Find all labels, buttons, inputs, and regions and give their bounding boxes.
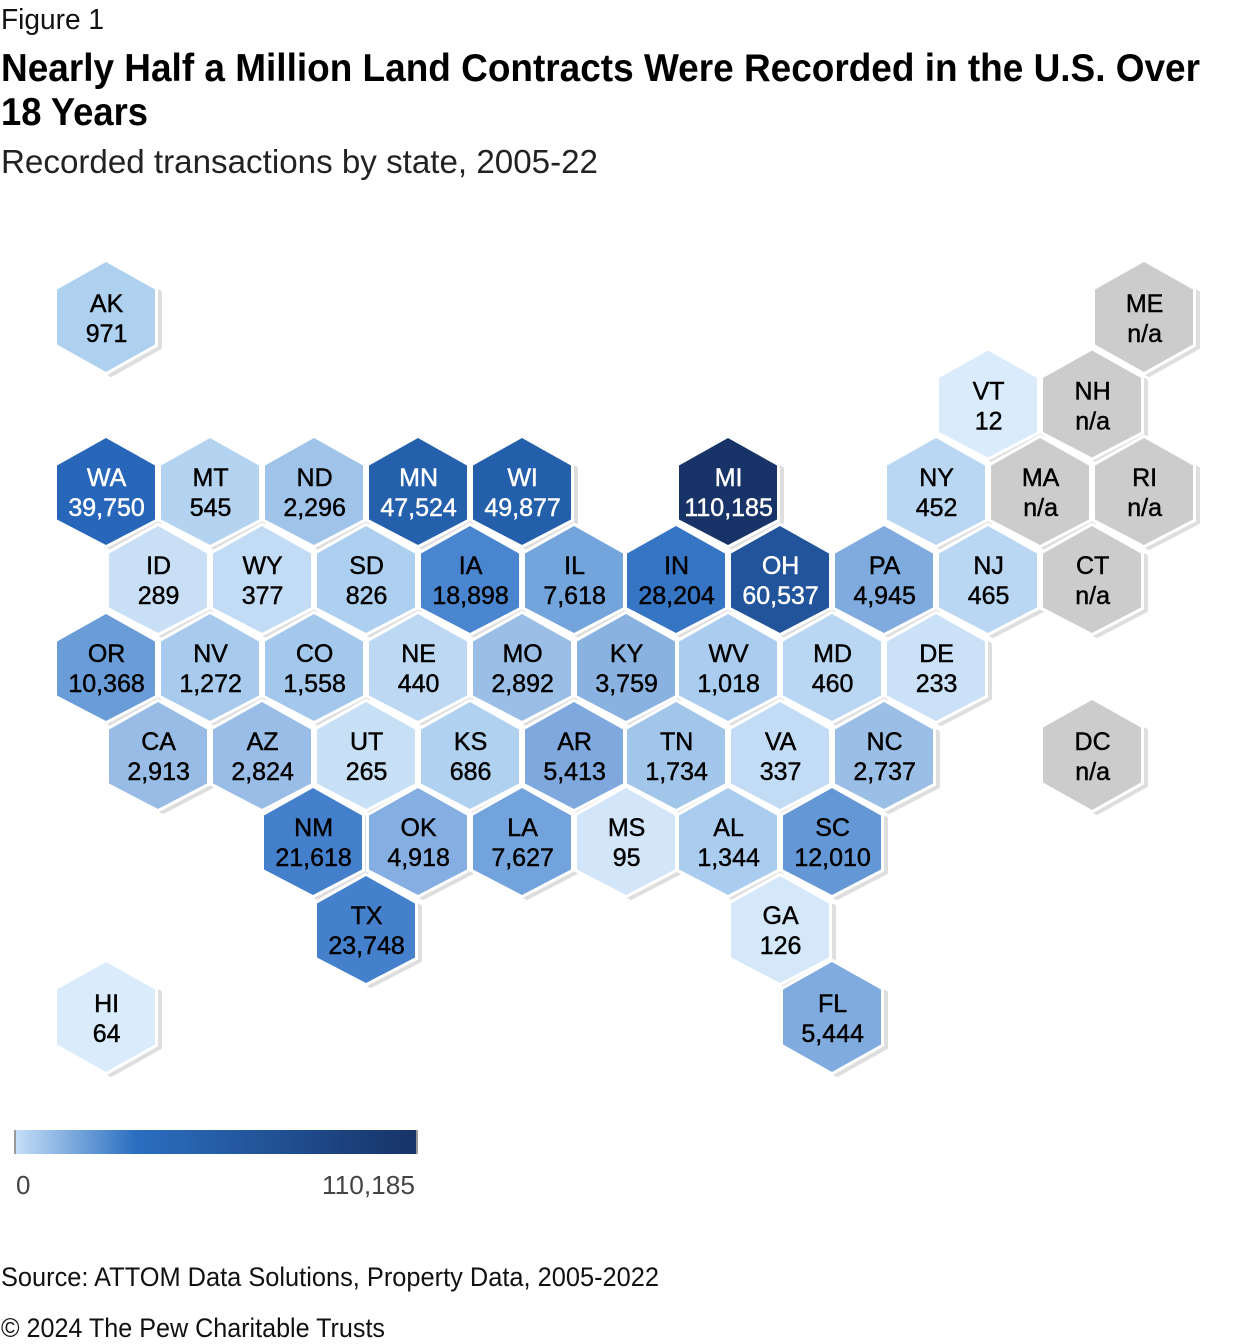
hex: NJ: 465 (968, 582, 1009, 610)
hex: CA (109, 702, 212, 812)
hex: VA (731, 702, 834, 812)
hex: IN: IN (664, 552, 689, 580)
hex: MS (577, 788, 680, 898)
hex: NY: 452 (916, 494, 957, 522)
hex: MI: MI (715, 464, 742, 492)
source note: Source: ATTOM Data Solutions, Property Data, 2005-2022 (1, 1262, 659, 1292)
hex: HI: HI (94, 990, 119, 1018)
hex: SC (783, 788, 886, 898)
hex: OR: OR (88, 640, 125, 668)
hex: ND: ND (297, 464, 333, 492)
hex: SD: SD (349, 552, 384, 580)
hex: MI: 110,185 (684, 494, 773, 522)
hex: DE: 233 (916, 670, 957, 698)
hex: AK (57, 262, 160, 375)
hex: AL (679, 788, 782, 898)
hex: NH: NH (1075, 378, 1111, 406)
hex: MT: 545 (190, 494, 231, 522)
hex: WV (679, 614, 782, 724)
hex: NM (264, 788, 367, 898)
hex: UT: 265 (346, 758, 387, 786)
hex: MS: 95 (613, 844, 641, 872)
hex: SD: 826 (346, 582, 387, 610)
legend min label: 0 (16, 1170, 30, 1200)
hex: TN: TN (660, 728, 693, 756)
hex: PA (835, 526, 938, 636)
copyright note: © 2024 The Pew Charitable Trusts (1, 1313, 385, 1343)
hex: GA: 126 (760, 932, 801, 960)
hex: HI (57, 962, 160, 1075)
hex: WY: WY (242, 552, 283, 580)
hex: VT (939, 350, 1042, 460)
hex: ND: 2,296 (283, 494, 346, 522)
hex: AL: AL (713, 814, 744, 842)
hex: WY (213, 526, 316, 636)
hex: VT: VT (973, 378, 1005, 406)
hex: AR (525, 702, 628, 812)
legend gradient bar (15, 1130, 417, 1154)
hex: NJ (939, 526, 1042, 636)
hex: IA: 18,898 (432, 582, 509, 610)
hex: RI: n/a (1127, 494, 1162, 522)
hex: ID: ID (146, 552, 171, 580)
hex: WV: 1,018 (697, 670, 760, 698)
hex: AZ: AZ (247, 728, 279, 756)
title: Nearly Half a Million Land Contracts Were Recorded in the U.S. Over (1, 47, 1200, 90)
hex: OK: 4,918 (387, 844, 450, 872)
hex: MO: 2,892 (491, 670, 554, 698)
hex: UT: UT (350, 728, 383, 756)
hex: HI: 64 (93, 1020, 121, 1048)
legend end tick: min (14, 1130, 16, 1154)
hex: IN: 28,204 (638, 582, 715, 610)
hex: KS: 686 (450, 758, 491, 786)
hex: SC: 12,010 (794, 844, 871, 872)
hex: NY (887, 438, 990, 548)
hex: FL (783, 962, 886, 1075)
hex: LA: LA (507, 814, 538, 842)
hex: MO: MO (502, 640, 543, 668)
hex: NE: 440 (398, 670, 439, 698)
hex: DC: DC (1075, 728, 1111, 756)
hex: DC (1043, 700, 1146, 813)
hex: TX: TX (351, 902, 383, 930)
hex: MN: MN (399, 464, 438, 492)
hex: DE (887, 614, 990, 724)
hex: AR: 5,413 (543, 758, 606, 786)
hex: ME (1095, 262, 1198, 375)
hex: KS (421, 702, 524, 812)
hex: NM: 21,618 (275, 844, 352, 872)
hex: ME: n/a (1127, 320, 1162, 348)
hex: IL: 7,618 (543, 582, 606, 610)
hex: OH: OH (762, 552, 799, 580)
hex: NC: 2,737 (853, 758, 916, 786)
hex: MT (161, 438, 264, 548)
hex: TN (627, 702, 730, 812)
hex: PA: 4,945 (853, 582, 916, 610)
hex: NE (369, 614, 472, 724)
hex: KY (577, 614, 680, 724)
hexagon tile map (57, 262, 1198, 1075)
title: 18 Years (1, 91, 148, 134)
hex: OH (731, 526, 834, 636)
hex: ME: ME (1126, 290, 1163, 318)
title (1, 47, 1200, 134)
hex: WA: WA (87, 464, 127, 492)
hex: RI: RI (1132, 464, 1157, 492)
hex: VA: 337 (760, 758, 801, 786)
hex: OR: 10,368 (68, 670, 145, 698)
hex: NV (161, 614, 264, 724)
hex: AZ (213, 702, 316, 812)
hex: NV: NV (193, 640, 228, 668)
hex: NY: NY (919, 464, 954, 492)
hex: MD: 460 (812, 670, 853, 698)
hex: KS: KS (454, 728, 487, 756)
hex: OK: OK (401, 814, 437, 842)
hex: CT: n/a (1075, 582, 1110, 610)
hex: GA (731, 876, 834, 986)
hex: NC: NC (867, 728, 903, 756)
hex: NC (835, 702, 938, 812)
hex: WA (57, 438, 160, 548)
hex: NJ: NJ (973, 552, 1004, 580)
hex: MI (679, 438, 782, 548)
hex: IA (421, 526, 524, 636)
subtitle: Recorded transactions by state, 2005-22 (1, 143, 598, 180)
hex: SC: SC (815, 814, 850, 842)
hex: FL: 5,444 (801, 1020, 864, 1048)
hex: ID (109, 526, 212, 636)
hex: PA: PA (869, 552, 901, 580)
hex: MA: n/a (1023, 494, 1058, 522)
hex: OH: 60,537 (742, 582, 819, 610)
hex: MA (991, 438, 1094, 548)
hex: WI (473, 438, 576, 548)
hex: CA: 2,913 (127, 758, 190, 786)
hex: IL: IL (564, 552, 585, 580)
legend end tick: max (416, 1130, 418, 1154)
hex: AZ: 2,824 (231, 758, 294, 786)
hex: CT (1043, 526, 1146, 636)
hex: MT: MT (193, 464, 229, 492)
hex: WI: 49,877 (484, 494, 561, 522)
hex: SD (317, 526, 420, 636)
hex: IL (525, 526, 628, 636)
hex: GA: GA (763, 902, 799, 930)
hex: OR (57, 614, 160, 724)
hex: DE: DE (919, 640, 954, 668)
figure label: Figure 1 (1, 4, 104, 36)
hex: UT (317, 702, 420, 812)
hex: WV: WV (708, 640, 749, 668)
hex: LA: 7,627 (491, 844, 554, 872)
legend (14, 1130, 418, 1200)
hex: DC: n/a (1075, 758, 1110, 786)
hex: MA: MA (1022, 464, 1060, 492)
hex: NV: 1,272 (179, 670, 242, 698)
hex: CO: CO (296, 640, 333, 668)
hex: AK: 971 (86, 320, 127, 348)
hex: AL: 1,344 (697, 844, 760, 872)
hex: MD (783, 614, 886, 724)
hex: IA: IA (459, 552, 483, 580)
hex: CT: CT (1076, 552, 1109, 580)
hex: AK: AK (90, 290, 124, 318)
hex: RI (1095, 438, 1198, 548)
hex: VA: VA (765, 728, 797, 756)
hex: MN: 47,524 (380, 494, 457, 522)
hex: FL: FL (818, 990, 847, 1018)
hex: KY: KY (610, 640, 644, 668)
hex: NH: n/a (1075, 408, 1110, 436)
legend max label: 110,185 (322, 1170, 415, 1200)
hex: NH (1043, 350, 1146, 460)
hex: TX (317, 876, 420, 986)
hex: WA: 39,750 (68, 494, 145, 522)
hex: AR: AR (557, 728, 592, 756)
hex: LA (473, 788, 576, 898)
hex: MD: MD (813, 640, 852, 668)
hex: VT: 12 (975, 408, 1003, 436)
hex: TX: 23,748 (328, 932, 405, 960)
hex: CO: 1,558 (283, 670, 346, 698)
hex: WI: WI (507, 464, 538, 492)
hex: CA: CA (141, 728, 176, 756)
hex: ND (265, 438, 368, 548)
hex: ID: 289 (138, 582, 179, 610)
hex: MO (473, 614, 576, 724)
hex: KY: 3,759 (595, 670, 658, 698)
hex: CO (265, 614, 368, 724)
hex: MN (369, 438, 472, 548)
hex: WY: 377 (242, 582, 283, 610)
hex: TN: 1,734 (645, 758, 708, 786)
hex: NE: NE (401, 640, 436, 668)
hex: IN (627, 526, 730, 636)
hex: OK (369, 788, 472, 898)
hex: MS: MS (608, 814, 645, 842)
hex: NM: NM (294, 814, 333, 842)
